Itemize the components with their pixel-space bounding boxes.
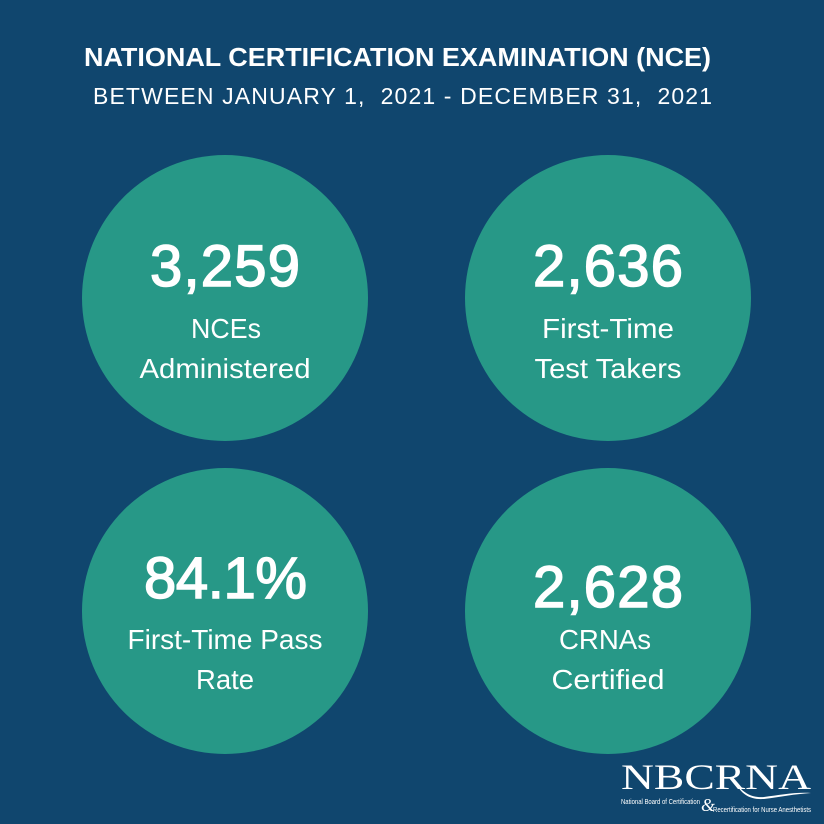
logo: NBCRNA	[621, 757, 811, 815]
number: 2,636: 2,636	[533, 234, 683, 299]
number: 3,259: 3,259	[150, 234, 300, 299]
panel: CRNAs certified	[465, 468, 751, 754]
logo: NBCRNA: National Board of Certification	[621, 799, 700, 806]
logo: NBCRNA: NBCRNA	[621, 757, 811, 797]
panel: first-time pass rate	[82, 468, 368, 754]
subtitle: date range: BETWEEN JANUARY 1, 2021 - DECEMBER 31, 2021	[93, 83, 712, 109]
label: CRNAs Certified: CRNAs	[559, 624, 651, 655]
label: First-Time Test Takers	[534, 313, 682, 384]
title: NATIONAL CERTIFICATION EXAMINATION (NCE)	[84, 42, 711, 72]
label: CRNAs Certified	[552, 624, 664, 695]
panel: NCEs administered	[82, 155, 368, 441]
label: First-Time Pass Rate: First-Time Pass	[128, 624, 322, 655]
logo: NBCRNA: &	[701, 795, 715, 815]
label: First-Time Test Takers: First-Time	[542, 313, 674, 344]
panel: first-time test takers	[465, 155, 751, 441]
number: 2,628: 2,628	[533, 555, 683, 620]
label: CRNAs Certified: Certified	[552, 664, 664, 695]
label: NCEs Administered: Administered	[140, 353, 310, 384]
label: First-Time Pass Rate	[128, 624, 322, 695]
label: NCEs Administered: NCEs	[191, 313, 261, 344]
label: First-Time Test Takers: Test Takers	[534, 353, 682, 384]
number: 84.1%: 84.1%	[144, 546, 307, 611]
label: First-Time Pass Rate: Rate	[196, 664, 254, 695]
label: NCEs Administered	[140, 313, 310, 384]
